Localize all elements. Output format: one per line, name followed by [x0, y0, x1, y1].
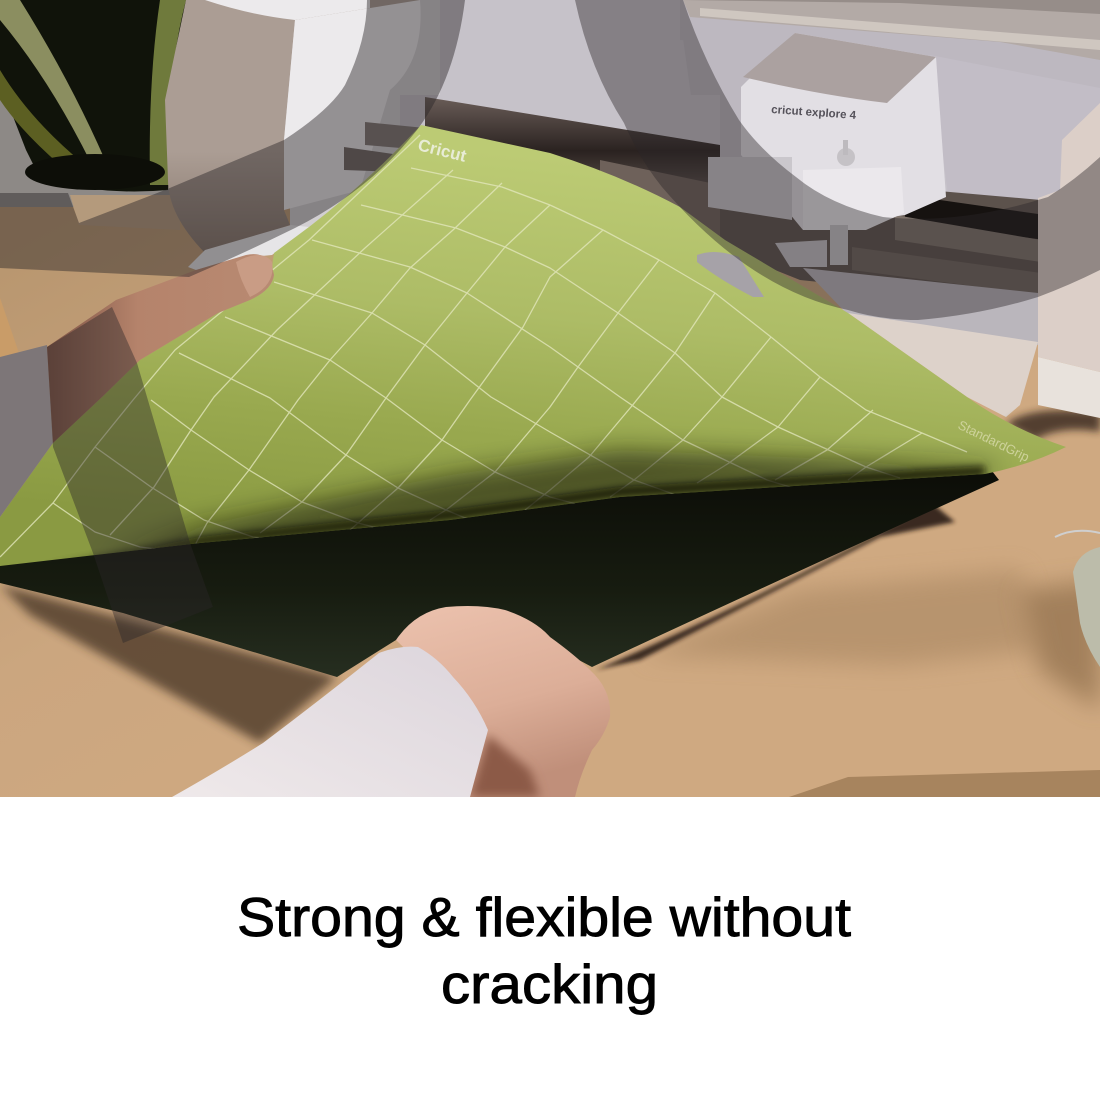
- left hand and sleeve: [0, 254, 274, 517]
- cutting machine body: [165, 0, 1100, 253]
- caption heading: [237, 886, 852, 1015]
- caption heading: Strong & flexible without: [237, 886, 851, 948]
- caption heading: cracking: [441, 953, 658, 1015]
- carriage label: cricut explore 4: [771, 104, 857, 122]
- mat hanging hole: [697, 252, 764, 297]
- print carriage: [708, 33, 946, 267]
- translucent arc overlays: [0, 0, 1100, 643]
- potted plant: [0, 0, 186, 192]
- machine bed and right end: [188, 103, 1100, 440]
- right hand: [396, 606, 610, 797]
- mat grid lines: [0, 135, 967, 557]
- dark underside of the mat: [0, 462, 999, 677]
- white sleeve: [172, 647, 488, 797]
- mat brand mark: Cricut: [416, 135, 469, 166]
- desk shadows and objects: [0, 503, 1100, 797]
- machine rails: [344, 97, 1045, 345]
- mat label: StandardGrip: [956, 417, 1032, 465]
- green cutting mat: [0, 125, 1066, 568]
- photo: cutting mat being peeled in front of a machine: [0, 0, 1100, 797]
- mat lower-edge shadow: [40, 450, 1000, 568]
- wall and desk background: [0, 0, 1100, 797]
